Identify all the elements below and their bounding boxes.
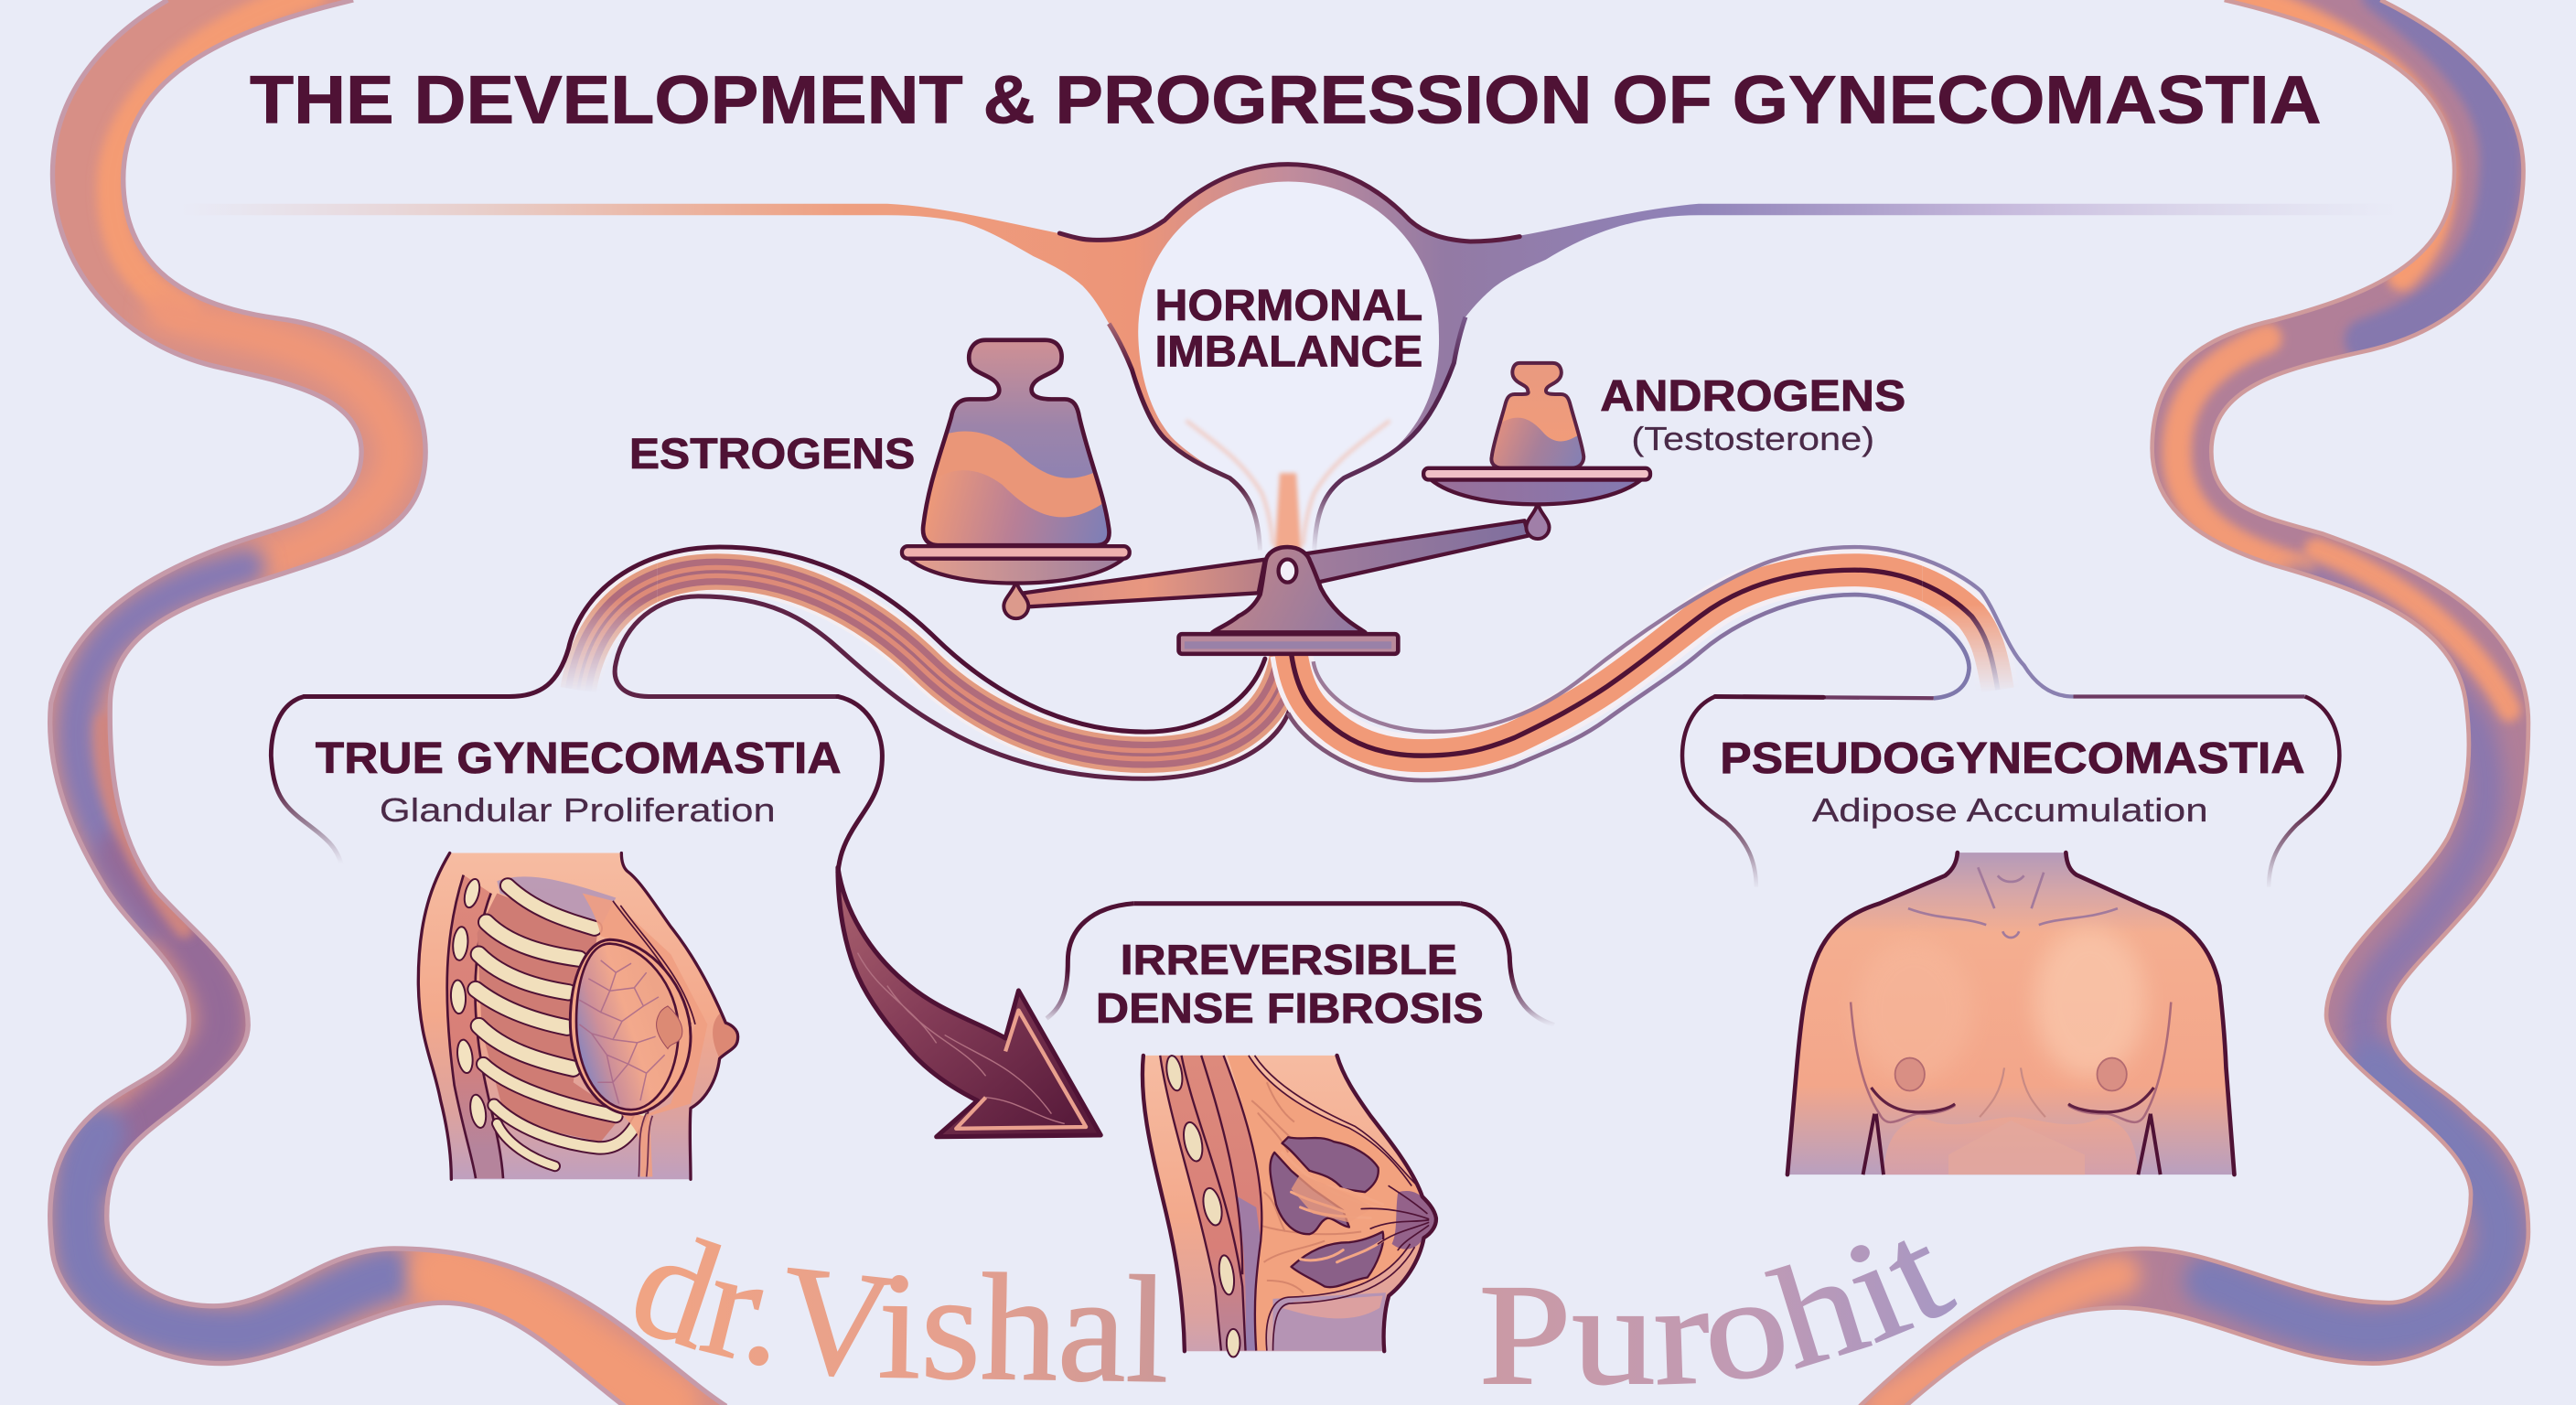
muscle lines bbox=[1160, 1056, 1261, 1351]
heading: IRREVERSIBLE bbox=[1121, 936, 1457, 983]
silhouette outline bbox=[1787, 853, 2234, 1174]
nipples bbox=[1895, 1058, 2127, 1090]
right flowing ribbon frame bbox=[1840, 0, 2563, 1405]
estrogen label: ESTROGENS bbox=[629, 430, 915, 478]
abdomen shading bbox=[1883, 1117, 2139, 1174]
circle label: HORMONAL bbox=[1155, 281, 1422, 330]
torso silhouette bbox=[418, 853, 738, 1179]
watermark: Purohit bbox=[1482, 1240, 1958, 1385]
pseudogynecomastia heading box bbox=[1682, 696, 2339, 887]
fibrous masses bbox=[1270, 1137, 1383, 1287]
beam bbox=[1024, 520, 1529, 606]
spine strip bbox=[447, 875, 503, 1178]
inner areola bbox=[657, 1006, 682, 1049]
androgen label: (Testosterone) bbox=[1631, 420, 1874, 457]
androgen label bbox=[1600, 371, 1905, 457]
orange fibrous streaks bbox=[1283, 1153, 1392, 1262]
heading: TRUE GYNECOMASTIA bbox=[316, 734, 842, 783]
skin outlines bbox=[1143, 1056, 1185, 1351]
right pan bbox=[1423, 468, 1650, 539]
small androgen weight bbox=[1489, 360, 1586, 467]
merged estrogen and androgen streams bbox=[181, 165, 2399, 478]
funnel glow bbox=[1186, 421, 1390, 551]
muscle strips bbox=[1160, 1056, 1261, 1351]
illustration: true gynecomastia cross-section bbox=[418, 853, 738, 1179]
circle interior bbox=[1138, 181, 1439, 551]
title: THE DEVELOPMENT & PROGRESSION OF GYNECOMASTIA bbox=[250, 62, 2322, 138]
heading: PSEUDOGYNECOMASTIA bbox=[1720, 734, 2305, 783]
skin outlines bbox=[418, 853, 451, 1179]
progression arrow bbox=[838, 867, 1100, 1137]
ducts and fascia lines bbox=[1249, 1056, 1418, 1351]
fulcrum bbox=[1179, 547, 1398, 654]
lobule network bbox=[579, 960, 665, 1104]
ribs bbox=[476, 885, 642, 1166]
glandular tissue capsule bbox=[583, 894, 707, 1177]
central flowing band: right branch bbox=[1288, 547, 2305, 780]
nipple bbox=[713, 1014, 738, 1058]
fatty breast tissue bbox=[1228, 1056, 1430, 1351]
chest wall muscle bbox=[478, 894, 622, 1142]
illustration: pseudogynecomastia chest bbox=[1787, 853, 2234, 1174]
left pan bbox=[902, 546, 1130, 618]
true gynecomastia heading box bbox=[271, 696, 882, 873]
circle label bbox=[1155, 281, 1422, 376]
vertebrae bbox=[1165, 1055, 1240, 1357]
circle outline bbox=[1059, 165, 1519, 241]
androgen label: ANDROGENS bbox=[1600, 371, 1905, 421]
large estrogen weight bbox=[920, 338, 1111, 544]
tissue streaks bbox=[1251, 1082, 1361, 1292]
hormonal imbalance circle with tapering lines bbox=[181, 165, 2399, 551]
shadow above ribs bbox=[497, 876, 616, 933]
illustration: irreversible dense fibrosis cross-section bbox=[1143, 1055, 1436, 1357]
circle label: IMBALANCE bbox=[1155, 327, 1422, 376]
balance scale bbox=[629, 328, 1905, 654]
fatty breast highlights bbox=[1855, 938, 1973, 1083]
vertebrae bbox=[450, 877, 488, 1129]
chest silhouette bbox=[1787, 853, 2234, 1174]
subheading: Glandular Proliferation bbox=[380, 791, 776, 829]
clavicle and neck lines bbox=[1908, 867, 2118, 938]
watermark: dr.Vishal bbox=[636, 1237, 1165, 1382]
subheading: Adipose Accumulation bbox=[1812, 791, 2208, 829]
arm and under-breast lines bbox=[1851, 1003, 2171, 1122]
heading: DENSE FIBROSIS bbox=[1096, 984, 1484, 1032]
heading bbox=[1096, 936, 1484, 1032]
irreversible dense fibrosis heading box bbox=[1046, 904, 1554, 1032]
central flowing band: left branch bbox=[304, 547, 1290, 778]
torso silhouette bbox=[1143, 1056, 1436, 1351]
left flowing ribbon frame bbox=[48, 0, 728, 1405]
nipple region with converging ducts bbox=[1392, 1191, 1436, 1249]
